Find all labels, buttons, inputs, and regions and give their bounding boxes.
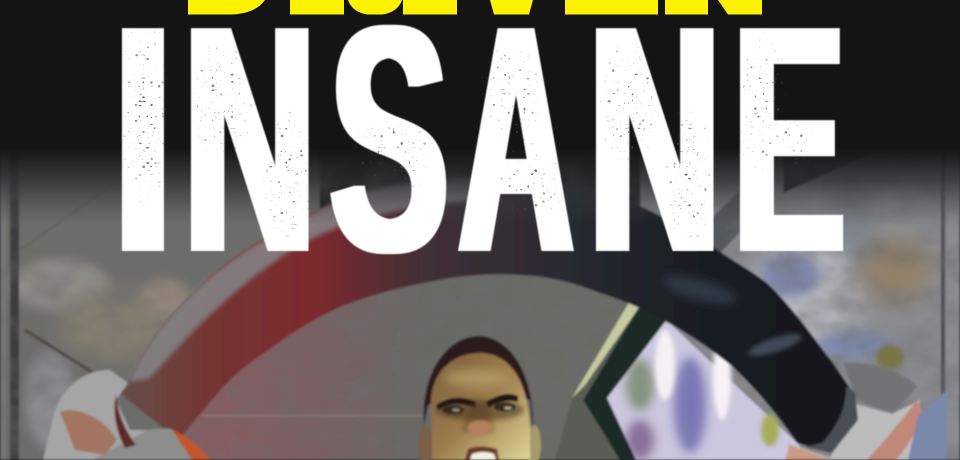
ears bbox=[418, 425, 432, 460]
wheel collar bbox=[805, 386, 858, 453]
driver face bbox=[418, 336, 541, 460]
left side wall bbox=[0, 130, 320, 460]
title word: DRIVEN (cropped yellow) bbox=[188, 0, 762, 14]
photo: car interior scene bbox=[0, 130, 960, 460]
photo grain texture bbox=[0, 130, 960, 460]
nose shadow and nose bbox=[462, 405, 494, 432]
side window bbox=[607, 317, 812, 460]
roof seam highlight bbox=[200, 415, 425, 416]
eyes bbox=[442, 406, 464, 414]
distressed speckle on title bbox=[122, 21, 817, 248]
side pillar strips bbox=[0, 150, 960, 460]
mouth bbox=[465, 446, 499, 460]
brows bbox=[436, 398, 476, 410]
steering wheel bbox=[118, 178, 858, 453]
wheel glare bbox=[746, 330, 804, 360]
door pillar bbox=[555, 301, 668, 460]
wheel grey top highlight bbox=[128, 178, 480, 382]
right hand back bbox=[785, 363, 947, 460]
hair bbox=[424, 336, 533, 430]
top fade over photo bbox=[0, 0, 960, 225]
left hand bbox=[43, 370, 210, 460]
roof lining bbox=[165, 240, 680, 460]
head bbox=[431, 353, 530, 460]
title word: INSANE bbox=[112, 0, 845, 321]
right side wall and blurred street bbox=[640, 130, 960, 460]
eye shadow band bbox=[436, 399, 524, 421]
